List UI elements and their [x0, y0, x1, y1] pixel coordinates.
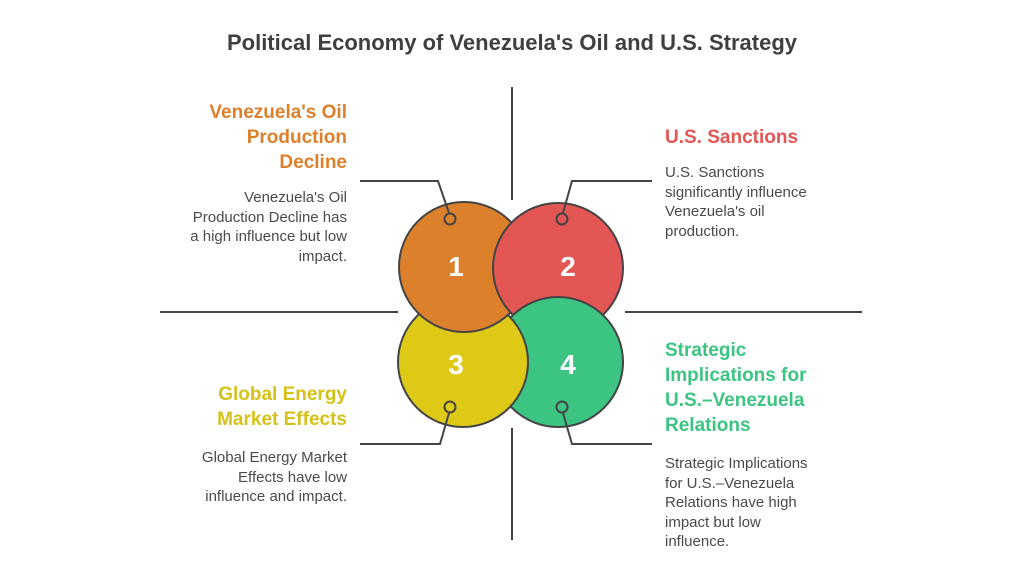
- heading 4: Relations: [665, 415, 751, 436]
- text 3: Effects have low: [238, 468, 347, 486]
- text 1: Production Decline has: [193, 208, 347, 226]
- text 2: Venezuela's oil: [665, 203, 765, 220]
- diagram: [160, 87, 862, 540]
- circle 4: [493, 297, 623, 427]
- text 1: Venezuela's Oil: [244, 189, 347, 206]
- text 3: [202, 449, 347, 505]
- text 4: for U.S.–Venezuela: [665, 474, 794, 492]
- heading 2: U.S. Sanctions: [665, 127, 798, 148]
- heading 1: Venezuela's Oil: [209, 102, 347, 123]
- heading 3: Market Effects: [217, 409, 347, 430]
- heading 3: Global Energy: [218, 384, 347, 405]
- heading 4: Strategic: [665, 340, 746, 361]
- text 1: [190, 189, 347, 264]
- text 2: U.S. Sanctions: [665, 164, 764, 181]
- text 2: [665, 164, 807, 240]
- heading 4: [665, 340, 806, 436]
- circle 2: [493, 203, 623, 333]
- text 2: production.: [665, 222, 739, 240]
- circle 3 overlap: [492, 315, 529, 409]
- text 4: influence.: [665, 533, 729, 550]
- text 3: Global Energy Market: [202, 449, 347, 466]
- heading 4: Implications for: [665, 365, 806, 386]
- connectors: [360, 181, 652, 444]
- text 4: Relations have high: [665, 494, 797, 511]
- heading 3: [217, 384, 347, 430]
- title: Political Economy of Venezuela's Oil and U.S. Strategy: [227, 30, 797, 55]
- text 2: significantly influence: [665, 184, 807, 200]
- text 3: influence and impact.: [205, 488, 347, 505]
- circle 1: [399, 202, 529, 332]
- heading 4: U.S.–Venezuela: [665, 390, 804, 411]
- diagram: 3: [448, 349, 464, 380]
- text 4: Strategic Implications: [665, 455, 808, 472]
- text 4: impact but low: [665, 514, 761, 530]
- text 4: [665, 455, 808, 550]
- heading 1: [209, 102, 347, 173]
- heading 1: Production: [247, 127, 347, 148]
- circle 3: [398, 297, 528, 427]
- diagram: 1: [448, 251, 464, 282]
- diagram: 2: [560, 251, 576, 282]
- text 1: impact.: [299, 248, 347, 264]
- text 1: a high influence but low: [190, 228, 347, 245]
- diagram: 4: [560, 349, 576, 380]
- heading 1: Decline: [279, 152, 347, 173]
